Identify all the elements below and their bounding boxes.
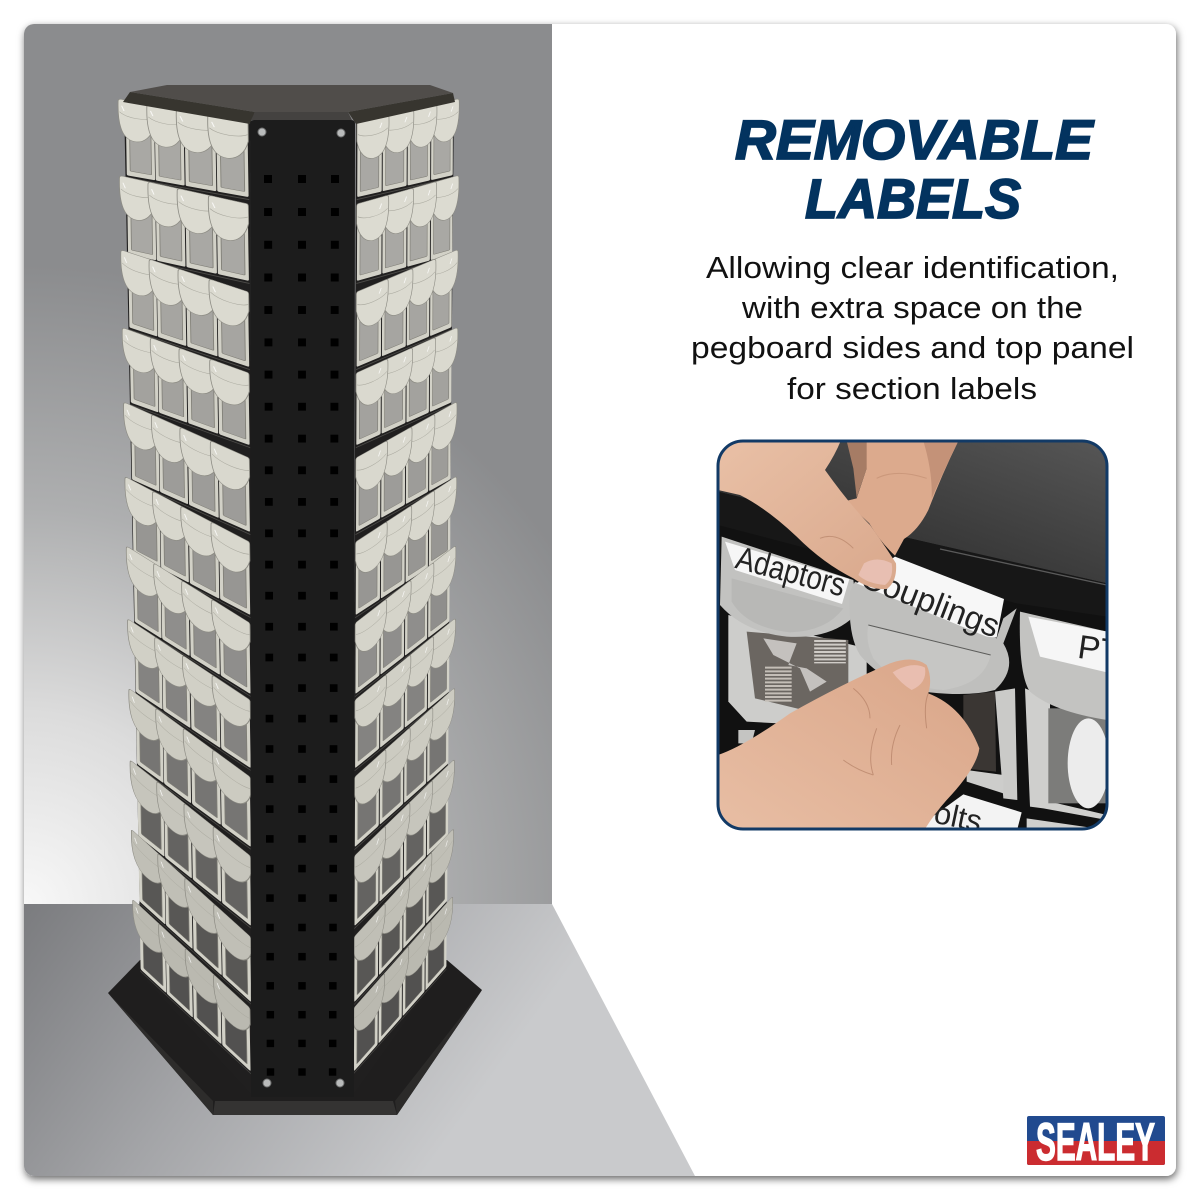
panel screws bbox=[258, 128, 345, 1087]
label: Adaptors: Adaptors bbox=[732, 539, 850, 603]
panel: room backdrop bbox=[24, 24, 695, 1176]
photo inset: hands removing a drawer label bbox=[718, 441, 1123, 839]
inset border bbox=[718, 441, 1107, 829]
product: rotating storage tower bbox=[108, 85, 482, 1115]
tower base bbox=[108, 960, 482, 1115]
upper hand bbox=[718, 441, 958, 589]
description text bbox=[691, 250, 1134, 406]
description text: for section labels bbox=[787, 371, 1037, 406]
wall bbox=[24, 24, 552, 904]
Adaptors drawer bbox=[720, 537, 867, 725]
tower top panel bbox=[123, 85, 455, 124]
lower hand bbox=[718, 660, 979, 832]
heading: LABELS bbox=[805, 167, 1021, 230]
drawer unit top surface bbox=[718, 441, 1107, 583]
right face backing bbox=[353, 100, 454, 1095]
black rim bbox=[918, 540, 1104, 583]
drawer window with fittings bbox=[747, 632, 848, 712]
PT drawer: PT bbox=[1076, 629, 1123, 672]
lower drawer labels: olts bbox=[931, 796, 985, 839]
left face backing bbox=[124, 100, 252, 1095]
pegboard holes bbox=[264, 175, 339, 1076]
description text: Allowing clear identification, bbox=[706, 250, 1119, 285]
heading: REMOVABLE bbox=[735, 108, 1095, 171]
PT drawer bbox=[1020, 612, 1123, 820]
floor bbox=[24, 904, 695, 1176]
lower drawer labels bbox=[738, 730, 1107, 839]
Couplings drawer bbox=[850, 557, 1017, 800]
description text: pegboard sides and top panel bbox=[691, 330, 1134, 365]
label: Couplings: Couplings bbox=[856, 558, 1005, 644]
heading bbox=[735, 108, 1095, 230]
pegboard panel bbox=[250, 120, 355, 1097]
description text: with extra space on the bbox=[741, 290, 1083, 325]
left drawer rows bbox=[118, 99, 252, 1074]
right drawer rows bbox=[353, 99, 459, 1074]
